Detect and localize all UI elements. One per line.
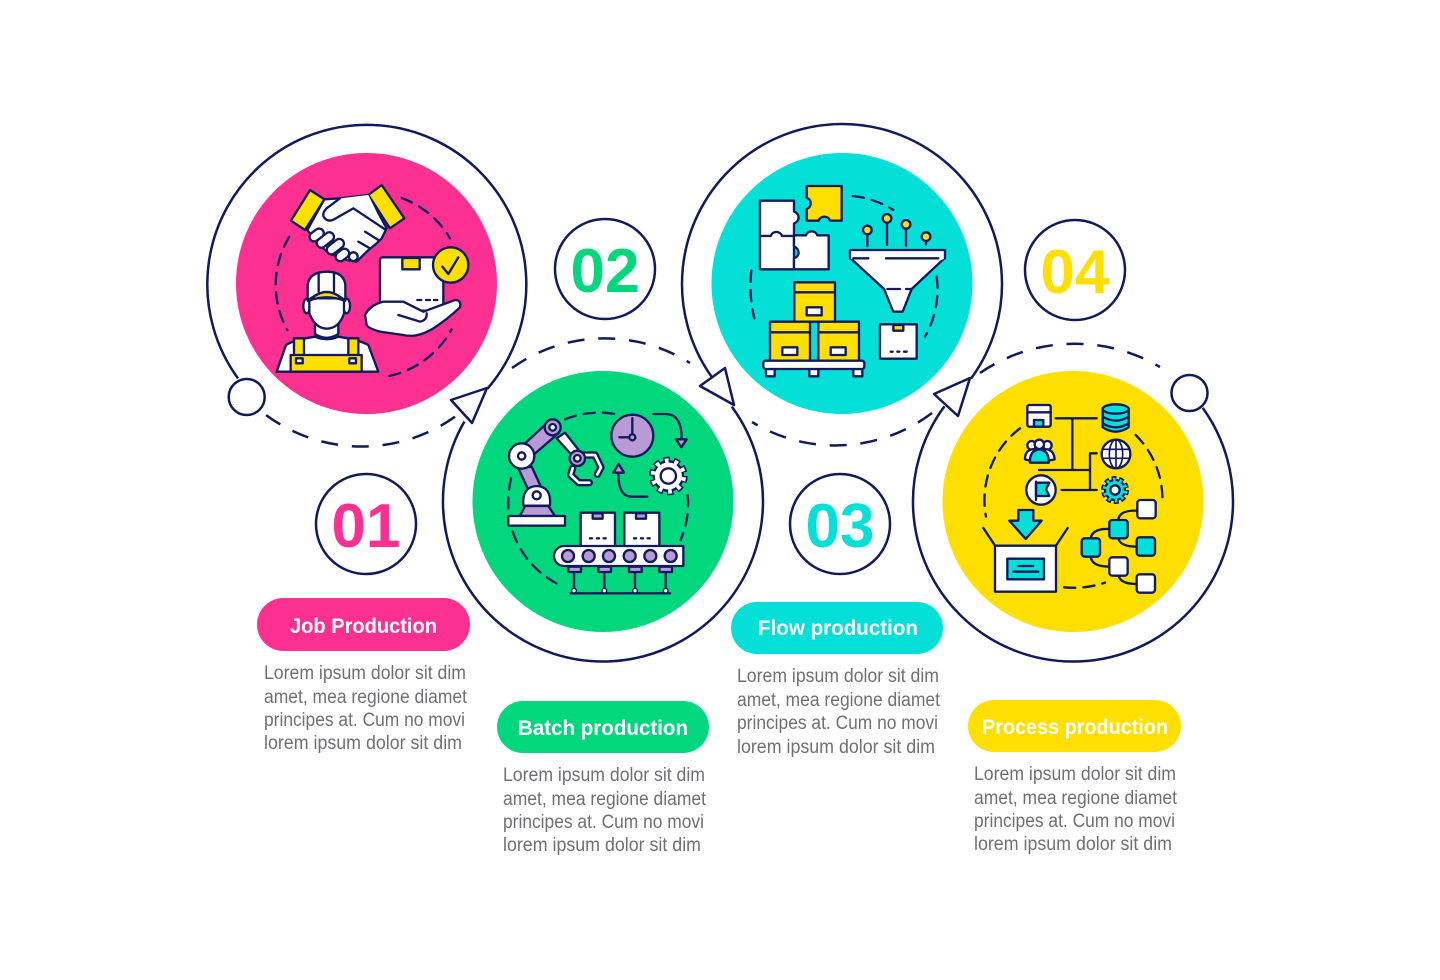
step number 04: 04 — [1041, 238, 1110, 307]
heading pill: flow production — [731, 602, 943, 654]
icon: job production — [276, 185, 468, 376]
text block: process production — [974, 764, 1178, 855]
heading pill: job production — [257, 598, 470, 651]
text block: process production: lorem ipsum dolor sit dim — [974, 834, 1172, 855]
step number 01: 01 — [332, 492, 400, 561]
text block: job production — [264, 663, 468, 754]
text block: job production: amet, mea regione diamet — [264, 687, 468, 708]
panel: job production disc — [236, 153, 497, 414]
panel: process production disc — [942, 371, 1204, 632]
text block: flow production: lorem ipsum dolor sit dim — [737, 737, 935, 758]
text block: job production: principes at. Cum no movi — [264, 710, 465, 731]
heading pill: job production: Job Production — [290, 615, 437, 638]
connector rings and dashed arcs — [207, 124, 1233, 662]
text block: batch production: amet, mea regione diamet — [503, 789, 707, 810]
step number 01 — [316, 474, 416, 574]
icon: flow production — [750, 186, 945, 376]
text block: process production: principes at. Cum no movi — [974, 811, 1175, 832]
panel: flow production disc — [712, 153, 972, 414]
end marker circle — [1172, 375, 1208, 411]
text block: flow production — [737, 666, 941, 758]
text block: batch production: Lorem ipsum dolor sit dim — [503, 765, 705, 786]
icon: process production — [983, 404, 1162, 593]
step number 03 — [790, 474, 890, 574]
text block: process production: Lorem ipsum dolor sit dim — [974, 764, 1176, 785]
text block: flow production: principes at. Cum no movi — [737, 713, 938, 734]
arrow: job to batch — [451, 388, 487, 423]
heading pill: process production — [968, 700, 1181, 752]
step number 02 — [555, 219, 655, 319]
step number 04 — [1025, 220, 1125, 320]
text block: batch production: lorem ipsum dolor sit dim — [503, 835, 701, 856]
heading pill: process production: Process production — [982, 716, 1168, 739]
step number 03: 03 — [806, 492, 874, 561]
heading pill: flow production: Flow production — [758, 617, 918, 640]
text block: job production: Lorem ipsum dolor sit dim — [264, 663, 466, 684]
arrow: flow to process — [934, 378, 970, 416]
text block: flow production: Lorem ipsum dolor sit dim — [737, 666, 939, 687]
text block: batch production: principes at. Cum no movi — [503, 812, 704, 833]
panel: batch production disc — [472, 371, 734, 632]
arrow: batch to flow — [700, 368, 734, 405]
icon: batch production — [508, 413, 688, 593]
text block: batch production — [503, 765, 707, 856]
start marker circle — [229, 379, 265, 415]
heading pill: batch production: Batch production — [518, 717, 688, 740]
step number 02: 02 — [571, 237, 639, 306]
heading pill: batch production — [497, 701, 709, 753]
text block: job production: lorem ipsum dolor sit dim — [264, 733, 462, 754]
text block: flow production: amet, mea regione diamet — [737, 690, 941, 711]
text block: process production: amet, mea regione diamet — [974, 788, 1178, 809]
